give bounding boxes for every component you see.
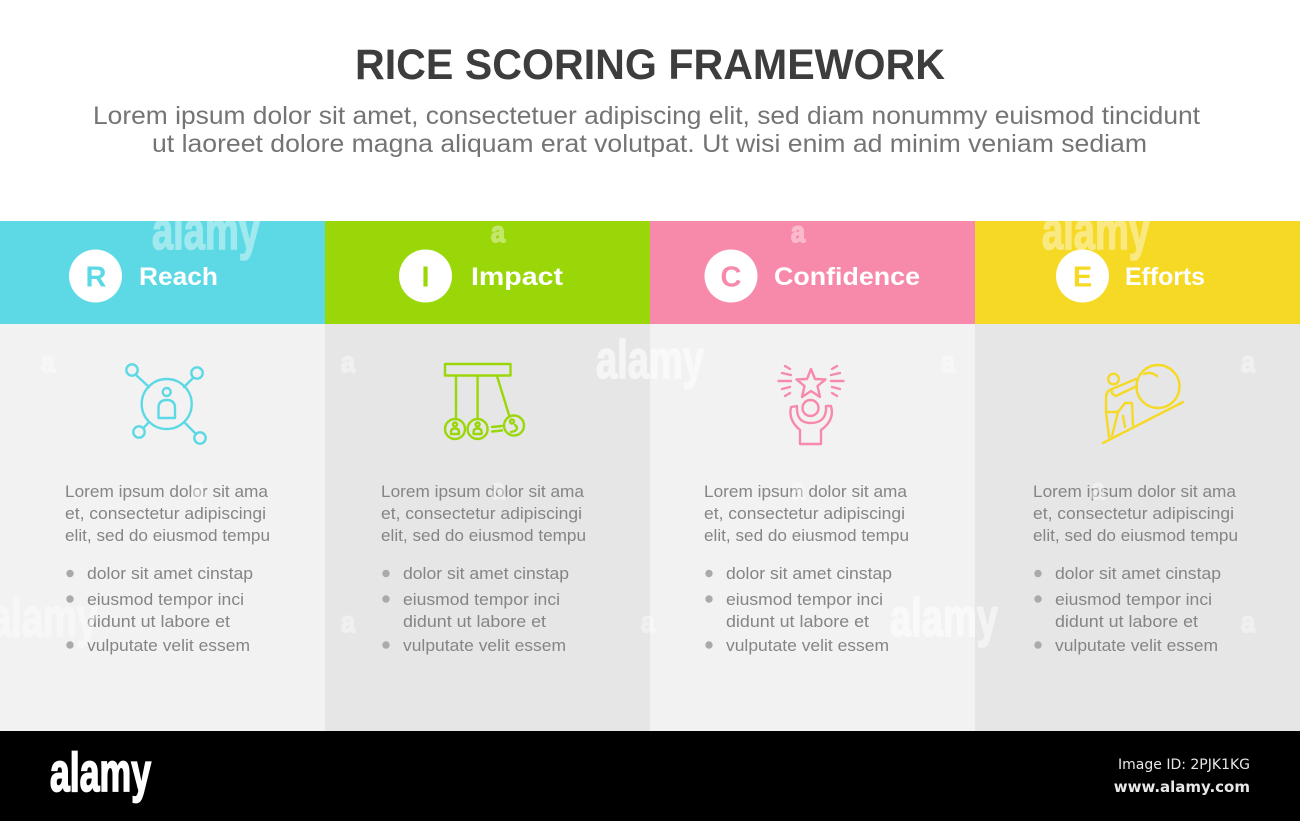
bullet list: didunt ut labore et (1055, 613, 1198, 631)
watermarks: a (341, 346, 355, 379)
description text: et, consectetur adipiscingi (381, 505, 582, 523)
description text: elit, sed do eiusmod tempu (65, 527, 270, 545)
bullet list: eiusmod tempor inci (87, 591, 244, 609)
bullet list: dolor sit amet cinstap (403, 565, 569, 583)
panel: confidence: Confidence (774, 263, 920, 291)
watermarks: a (641, 606, 655, 639)
description text: elit, sed do eiusmod tempu (1033, 527, 1238, 545)
watermarks: a (491, 216, 505, 249)
watermarks: alamy (1042, 201, 1150, 261)
bullet list: eiusmod tempor inci (403, 591, 560, 609)
bullet list (66, 565, 253, 655)
watermarks: a (341, 606, 355, 639)
footer logo: alamy (50, 741, 151, 803)
description text: et, consectetur adipiscingi (65, 505, 266, 523)
description text (65, 483, 270, 545)
description text: et, consectetur adipiscingi (704, 505, 905, 523)
panel: reach: Reach (139, 263, 218, 291)
footer bar (0, 731, 1300, 821)
bullet list: vulputate velit essem (87, 637, 250, 655)
bullet list: dolor sit amet cinstap (87, 565, 253, 583)
watermarks: alamy (152, 201, 260, 261)
bullet list (1034, 565, 1221, 655)
description text (704, 483, 909, 545)
panel: efforts: Efforts (1125, 263, 1205, 291)
panel: confidence: C (721, 262, 742, 294)
watermarks: a (491, 473, 505, 506)
panel: confidence (650, 221, 975, 731)
panel: impact: Impact (471, 263, 564, 291)
description text: elit, sed do eiusmod tempu (381, 527, 586, 545)
watermarks: a (1241, 606, 1255, 639)
bullet list (382, 565, 569, 655)
description text: et, consectetur adipiscingi (1033, 505, 1234, 523)
bullet list: eiusmod tempor inci (1055, 591, 1212, 609)
icon: newton cradle (445, 364, 524, 439)
description text (381, 483, 586, 545)
bullet list: eiusmod tempor inci (726, 591, 883, 609)
description text: elit, sed do eiusmod tempu (704, 527, 909, 545)
bullet list: dolor sit amet cinstap (1055, 565, 1221, 583)
bullet list (705, 565, 892, 655)
watermarks: a (41, 346, 55, 379)
description text: Lorem ipsum dolor sit ama (381, 483, 585, 501)
panel: efforts: E (1073, 262, 1092, 294)
description text: Lorem ipsum dolor sit ama (65, 483, 269, 501)
title: RICE SCORING FRAMEWORK (355, 41, 945, 89)
watermarks: a (941, 346, 955, 379)
watermarks: a (191, 473, 205, 506)
watermarks: alamy (596, 330, 704, 390)
icon: person pushing boulder uphill (1103, 365, 1183, 443)
description text (1033, 483, 1238, 545)
panel: reach (0, 221, 325, 731)
website url: www.alamy.com (1114, 778, 1250, 796)
icon: hands raising star (778, 366, 844, 444)
watermarks: a (791, 473, 805, 506)
bullet list: didunt ut labore et (87, 613, 230, 631)
panel: impact: I (421, 262, 430, 294)
subtitle text block: ut laoreet dolore magna aliquam erat volutpat. Ut wisi enim ad minim veniam sediam (152, 130, 1147, 158)
subtitle text block (93, 102, 1200, 158)
bullet list: vulputate velit essem (726, 637, 889, 655)
bullet list: didunt ut labore et (726, 613, 869, 631)
panel: impact (325, 221, 650, 731)
watermarks: a (1241, 346, 1255, 379)
bullet list: didunt ut labore et (403, 613, 546, 631)
description text: Lorem ipsum dolor sit ama (1033, 483, 1237, 501)
watermarks: a (1091, 473, 1105, 506)
subtitle text block: Lorem ipsum dolor sit amet, consectetuer adipiscing elit, sed diam nonummy euismod tincidunt (93, 102, 1200, 130)
bullet list: vulputate velit essem (1055, 637, 1218, 655)
watermarks: a (791, 216, 805, 249)
image id: Image ID: 2PJK1KG (1118, 757, 1250, 773)
bullet list: vulputate velit essem (403, 637, 566, 655)
icon: network of people (126, 364, 206, 444)
panel: reach: R (86, 262, 107, 294)
watermarks (0, 201, 1255, 648)
watermarks: alamy (890, 588, 998, 648)
description text: Lorem ipsum dolor sit ama (704, 483, 908, 501)
panel: efforts (975, 221, 1300, 731)
bullet list: dolor sit amet cinstap (726, 565, 892, 583)
